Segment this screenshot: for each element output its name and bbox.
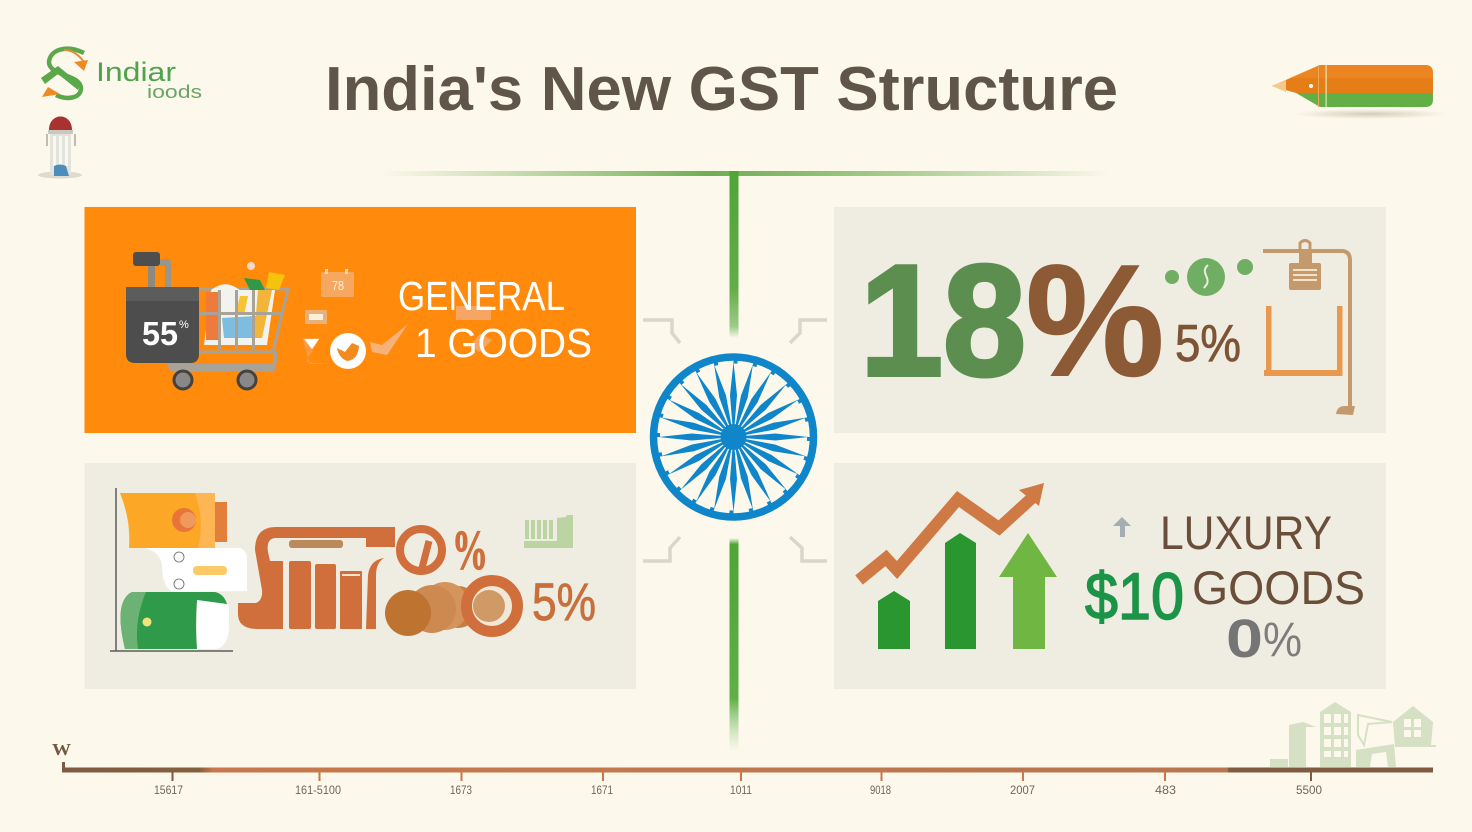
text: goods: GOODS	[1192, 561, 1365, 614]
title: India's New GST Structure	[325, 55, 1118, 124]
icon: green coins	[1165, 258, 1253, 296]
text: general: GENERAL	[398, 273, 565, 319]
bar chart	[878, 533, 1057, 649]
timeline	[52, 740, 1433, 797]
timeline labels: 15617	[154, 783, 183, 797]
text: 5 percent: 5%	[532, 573, 596, 632]
timeline labels: 1671	[591, 783, 613, 797]
icon: shopping cart: %	[179, 319, 189, 331]
connector brackets	[643, 320, 827, 561]
icon: small scattered marks	[302, 306, 492, 369]
icon: up arrow	[1113, 517, 1131, 537]
timeline labels: 1011	[730, 783, 752, 797]
icon: Indian Goods logo: ioods	[147, 82, 202, 102]
icon: orange column	[238, 527, 395, 629]
icon: shopping cart	[126, 252, 288, 389]
icon: white box	[145, 548, 247, 592]
divider: vertical green line top	[730, 171, 738, 338]
icon: trend arrow	[859, 483, 1044, 580]
icon: axis	[110, 488, 233, 651]
text: zero percent	[1226, 609, 1302, 669]
icon: coin stack	[385, 580, 518, 636]
text: goods: 1 GOODS	[415, 320, 592, 366]
panel: general goods	[84, 207, 636, 433]
big percent sign: %	[1026, 233, 1164, 409]
timeline labels: 483	[1155, 783, 1176, 797]
text: percent sign: %	[452, 520, 488, 582]
text: luxury: LUXURY	[1160, 506, 1332, 559]
text: 5 percent: 5%	[1175, 315, 1241, 373]
timeline labels: 1673	[450, 783, 472, 797]
text: zero percent: %	[1263, 614, 1302, 667]
icon: ring with slash	[400, 529, 442, 572]
icon: tower	[38, 116, 82, 178]
timeline labels: 9018	[870, 783, 891, 797]
icon: calendar badge	[321, 269, 354, 297]
icon: pencil	[1272, 65, 1448, 119]
icon: ashoka chakra wheel	[654, 357, 814, 517]
icon: shopping cart: 55	[142, 315, 178, 352]
big number 18: 18	[860, 233, 1026, 409]
timeline labels: 5500	[1296, 783, 1322, 797]
icon: orange frame	[1264, 306, 1342, 376]
icon: tag stand	[1263, 240, 1355, 415]
icon: orange box	[120, 493, 227, 548]
timeline: W	[52, 740, 71, 759]
timeline labels	[154, 783, 1322, 797]
divider: vertical green line bottom	[730, 538, 738, 752]
icon: Indian Goods logo: Indiar	[96, 57, 176, 87]
text: zero percent: 0	[1226, 609, 1263, 669]
timeline labels: 2007	[1010, 783, 1035, 797]
panel: 18 percent	[834, 207, 1386, 433]
icon: small green building	[524, 515, 573, 548]
panel: reduced goods	[84, 463, 636, 689]
icon: calendar badge: 78	[332, 278, 344, 293]
text: ten dollars: $10	[1085, 559, 1184, 633]
timeline labels: 161-5100	[295, 783, 341, 797]
divider: horizontal green line	[380, 171, 1110, 176]
panel: luxury goods	[834, 463, 1386, 689]
icon: city skyline	[1270, 702, 1436, 767]
icon: green roll	[121, 592, 229, 649]
icon: Indian Goods logo	[41, 49, 202, 102]
timeline ticks	[172, 772, 1311, 781]
